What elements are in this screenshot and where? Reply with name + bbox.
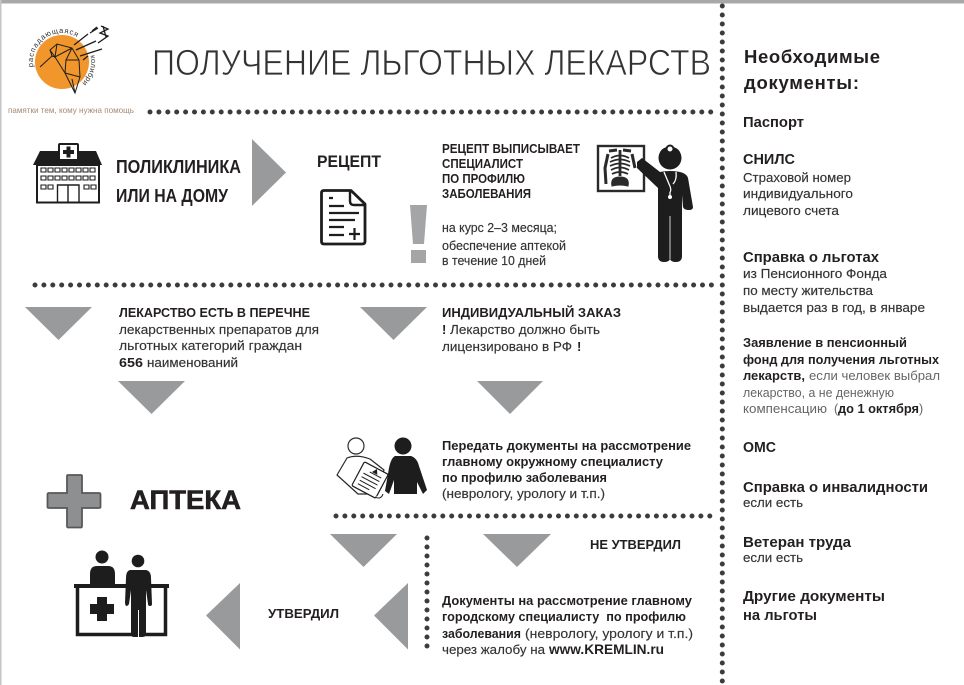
tagline: памятки тем, кому нужна помощь bbox=[8, 105, 135, 115]
item: benefits certificate: выдается раз в год, в январе bbox=[743, 301, 925, 315]
specialist text: в течение 10 дней bbox=[442, 254, 546, 268]
title: ПОЛУЧЕНИЕ ЛЬГОТНЫХ ЛЕКАРСТВ bbox=[152, 42, 711, 83]
icon: two people with documents bbox=[337, 438, 427, 498]
item: pension fund application: ) bbox=[919, 402, 923, 416]
arrow: down to pharmacy bbox=[118, 381, 185, 414]
icon: pharmacy cross bbox=[48, 475, 100, 528]
item: disability certificate: Справка о инвалидности bbox=[743, 480, 928, 496]
arrow: down left bbox=[25, 307, 92, 340]
item: other documents bbox=[743, 589, 885, 624]
item: pension fund application: ( bbox=[834, 402, 839, 416]
individual order text bbox=[442, 305, 621, 354]
item: pension fund application: лекарств, bbox=[743, 369, 805, 383]
item: pension fund application: компенсацию bbox=[743, 402, 827, 416]
icon: prescription document bbox=[322, 190, 365, 244]
list text: лекарственных препаратов для bbox=[119, 322, 319, 337]
individual order text: Лекарство должно быть bbox=[450, 322, 600, 337]
district specialist text: по профилю заболевания bbox=[442, 470, 607, 485]
item: benefits certificate: Справка о льготах bbox=[743, 250, 879, 266]
item: benefits certificate: из Пенсионного Фонда bbox=[743, 267, 887, 281]
city specialist text bbox=[442, 593, 693, 657]
icon: doctor with x-ray bbox=[598, 146, 693, 262]
clinic label: ПОЛИКЛИНИКА bbox=[116, 157, 241, 177]
specialist text: ЗАБОЛЕВАНИЯ bbox=[442, 187, 531, 201]
specialist text: СПЕЦИАЛИСТ bbox=[442, 157, 523, 171]
item: disability certificate bbox=[743, 480, 928, 510]
label: approved: УТВЕРДИЛ bbox=[268, 606, 339, 621]
arrow: left to approved bbox=[374, 583, 408, 650]
list text bbox=[119, 305, 319, 370]
item: pension fund application: если человек выбрал bbox=[809, 369, 940, 383]
item: pension fund application bbox=[743, 336, 940, 416]
individual order text: лицензировано в РФ bbox=[442, 339, 572, 354]
specialist text: РЕЦЕПТ ВЫПИСЫВАЕТ bbox=[442, 142, 580, 156]
icon: exclamation mark bbox=[410, 205, 427, 263]
arrow: left to counter bbox=[206, 583, 240, 650]
specialist text: обеспечение аптекой bbox=[442, 239, 566, 253]
arrow: to prescription bbox=[252, 139, 286, 206]
arrow: down approved bbox=[330, 534, 397, 567]
list text: льготных категорий граждан bbox=[119, 338, 302, 353]
list text: 656 bbox=[119, 355, 143, 370]
icon: clinic building bbox=[33, 144, 102, 203]
district specialist text: главному окружному специалисту bbox=[442, 454, 664, 469]
pharmacy heading: АПТЕКА bbox=[130, 485, 241, 515]
clinic label bbox=[116, 157, 241, 206]
city specialist text: (неврологу, урологу и т.п.) bbox=[525, 626, 693, 641]
item: labour veteran: Ветеран труда bbox=[743, 535, 852, 551]
arrow: down to documents bbox=[477, 381, 543, 414]
logo: hummingbird: колибри bbox=[82, 55, 96, 86]
city specialist text: через жалобу на bbox=[442, 642, 546, 657]
item: oms: ОМС bbox=[743, 440, 777, 456]
list text: наименований bbox=[147, 355, 238, 370]
item: other documents: Другие документы bbox=[743, 589, 885, 605]
item: labour veteran: если есть bbox=[743, 551, 803, 565]
district specialist text bbox=[442, 438, 691, 501]
item: snils: СНИЛС bbox=[743, 152, 796, 168]
item: benefits certificate: по месту жительства bbox=[743, 284, 873, 298]
item: benefits certificate bbox=[743, 250, 925, 315]
item: snils bbox=[743, 152, 853, 218]
specialist text: на курс 2–3 месяца; bbox=[442, 221, 557, 235]
item: snils: Страховой номер bbox=[743, 171, 851, 185]
city specialist text: www.KREMLIN.ru bbox=[548, 641, 664, 657]
item: snils: лицевого счета bbox=[743, 204, 839, 218]
item: pension fund application: фонд для получения льготных bbox=[743, 353, 939, 367]
panel heading: документы: bbox=[744, 72, 859, 93]
specialist text bbox=[442, 142, 580, 268]
panel: required documents bbox=[743, 46, 940, 624]
icon: pharmacy counter with people bbox=[74, 550, 169, 637]
individual order text: ! bbox=[442, 322, 446, 337]
logo: hummingbird: распадающаяся bbox=[29, 28, 78, 67]
logo: hummingbird bbox=[29, 25, 110, 94]
arrow: down right bbox=[360, 307, 427, 340]
label: not approved: НЕ УТВЕРДИЛ bbox=[590, 537, 681, 552]
specialist text: ПО ПРОФИЛЮ bbox=[442, 172, 525, 186]
city specialist text: Документы на рассмотрение главному bbox=[442, 593, 693, 608]
city specialist text: заболевания bbox=[442, 626, 521, 641]
item: pension fund application: до 1 октября bbox=[838, 402, 919, 416]
city specialist text: городскому специалисту по профилю bbox=[442, 609, 686, 624]
item: other documents: на льготы bbox=[743, 608, 817, 624]
panel heading: Необходимые bbox=[744, 46, 880, 67]
district specialist text: Передать документы на рассмотрение bbox=[442, 438, 691, 453]
individual order text: ! bbox=[577, 339, 581, 354]
district specialist text: (неврологу, урологу и т.п.) bbox=[442, 486, 605, 501]
list text: ЛЕКАРСТВО ЕСТЬ В ПЕРЕЧНЕ bbox=[119, 305, 310, 320]
individual order text: ИНДИВИДУАЛЬНЫЙ ЗАКАЗ bbox=[442, 305, 621, 320]
arrow: down not approved bbox=[483, 534, 551, 567]
panel heading bbox=[744, 46, 880, 93]
item: pension fund application: лекарство, а не денежную bbox=[743, 386, 894, 400]
item: disability certificate: если есть bbox=[743, 496, 803, 510]
item: passport: Паспорт bbox=[743, 115, 804, 131]
item: labour veteran bbox=[743, 535, 852, 565]
prescription heading: РЕЦЕПТ bbox=[317, 152, 382, 171]
clinic label: ИЛИ НА ДОМУ bbox=[116, 186, 229, 206]
item: snils: индивидуального bbox=[743, 187, 853, 201]
item: pension fund application: Заявление в пенсионный bbox=[743, 336, 907, 350]
